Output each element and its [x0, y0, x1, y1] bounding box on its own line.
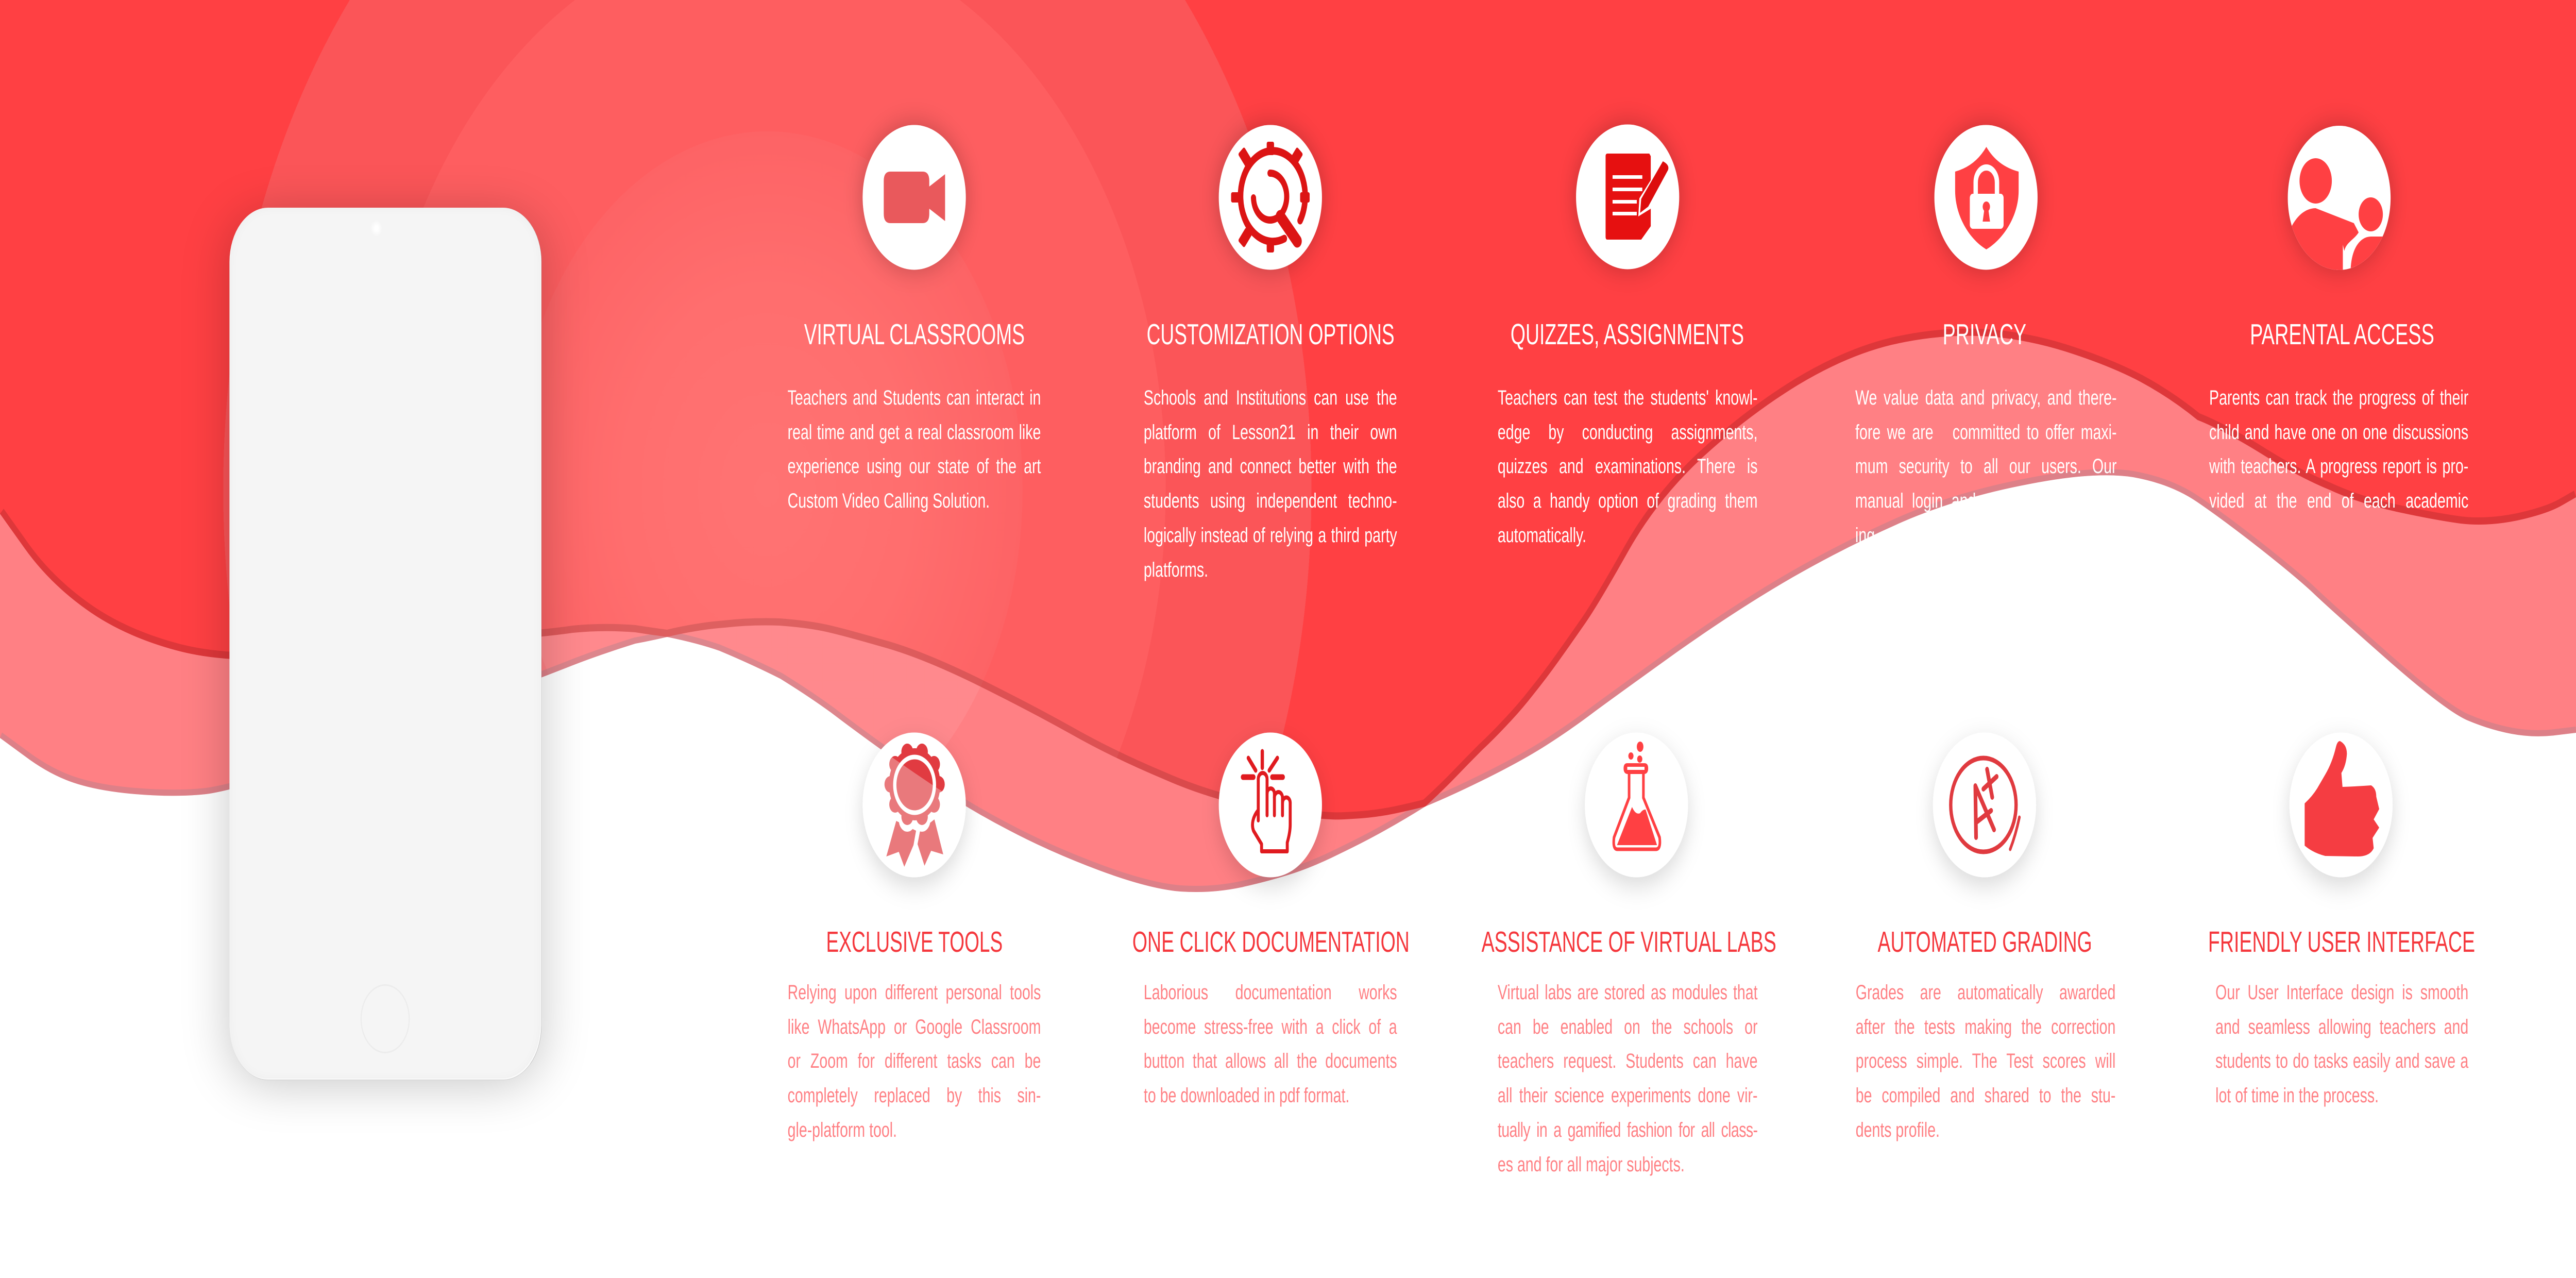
body text: real time and get a real classroom like	[788, 421, 1041, 444]
body text: or Zoom for different tasks can be	[788, 1050, 1041, 1072]
body text: can be enabled on the schools or	[1498, 1016, 1757, 1038]
body text: teachers request. Students can have	[1498, 1050, 1757, 1072]
body text: and seamless allowing teachers and	[2215, 1016, 2468, 1038]
heading: FRIENDLY USER INTERFACE	[2208, 926, 2475, 959]
heading: CUSTOMIZATION OPTIONS	[1147, 318, 1395, 351]
body text: button that allows all the documents	[1144, 1050, 1397, 1072]
heading: QUIZZES, ASSIGNMENTS	[1511, 318, 1744, 351]
wavy red background	[0, 0, 2576, 892]
pink wave layer	[0, 336, 2576, 892]
heading: PRIVACY	[1943, 318, 2026, 351]
icon: thumbs up	[2290, 733, 2393, 877]
body text	[1144, 386, 1397, 581]
heading: VIRTUAL CLASSROOMS	[804, 318, 1025, 351]
phone home button	[361, 984, 410, 1053]
body text	[1498, 386, 1757, 547]
body text	[1856, 976, 2115, 1148]
icon: video camera	[862, 125, 966, 270]
body text: mum security to all our users. Our	[1855, 455, 2116, 478]
body text: experience using our state of the art	[788, 455, 1041, 478]
heading: AUTOMATED GRADING	[1878, 926, 2092, 959]
body text: Our User Interface design is smooth	[2215, 981, 2468, 1004]
icon: A plus grade	[1933, 733, 2036, 877]
body text: Teachers and Students can interact in	[788, 386, 1041, 409]
body text: Schools and Institutions can use the	[1144, 386, 1397, 409]
body text	[1144, 981, 1397, 1107]
body text: Teachers can test the students' knowl-	[1498, 386, 1757, 409]
body text: gle-platform tool.	[788, 1119, 897, 1141]
body text: manual login and	[1855, 490, 1976, 512]
icon: clicking hand	[1219, 733, 1322, 877]
body text: dents profile.	[1856, 1119, 1940, 1141]
body text: logically instead of relying a third party	[1144, 524, 1397, 547]
body text	[1855, 386, 2116, 547]
phone camera sensor	[370, 220, 382, 237]
body text: after the tests making the correction	[1856, 1016, 2115, 1038]
body text: branding and connect better with the	[1144, 455, 1397, 478]
body text: also a handy option of grading them	[1498, 490, 1757, 512]
body text: Virtual labs are stored as modules that	[1498, 981, 1757, 1004]
body text: edge by conducting assignments,	[1498, 421, 1757, 444]
body text: fore we are committed to offer maxi-	[1855, 421, 2116, 444]
phone mockup	[229, 208, 541, 1080]
icon: lab flask	[1585, 733, 1688, 877]
body text: tually in a gamified fashion for all class-	[1498, 1119, 1757, 1141]
body text: be compiled and shared to the stu-	[1856, 1084, 2115, 1107]
body text: vided at the end of each academic	[2209, 490, 2468, 512]
body text: Relying upon different personal tools	[788, 981, 1041, 1004]
panel: one click documentation	[1132, 733, 1410, 1107]
body text: process simple. The Test scores will	[1856, 1050, 2115, 1072]
body text: ing	[1855, 524, 1875, 547]
body text	[788, 386, 1041, 512]
body text: automatically.	[1498, 524, 1586, 547]
body text	[2209, 386, 2468, 512]
body text: quizzes and examinations. There is	[1498, 455, 1757, 478]
body text	[788, 981, 1041, 1141]
body text: Custom Video Calling Solution.	[788, 490, 990, 512]
heading: ASSISTANCE OF VIRTUAL LABS	[1482, 926, 1776, 959]
panel: virtual classrooms	[788, 112, 1041, 512]
icon: gear with magnifier	[1219, 125, 1322, 270]
body text: lot of time in the process.	[2215, 1084, 2379, 1107]
body text: with teachers. A progress report is pro-	[2209, 455, 2468, 478]
panel: parental access	[2209, 112, 2468, 512]
body text: like WhatsApp or Google Classroom	[788, 1016, 1041, 1038]
body text	[1498, 976, 1757, 1182]
body text: es and for all major subjects.	[1498, 1153, 1685, 1176]
heading: ONE CLICK DOCUMENTATION	[1132, 926, 1410, 959]
panel: assistance of virtual labs	[1482, 734, 1776, 1176]
heading: EXCLUSIVE TOOLS	[826, 926, 1003, 959]
body text: Laborious documentation works	[1144, 981, 1397, 1004]
panel: automated grading	[1856, 727, 2115, 1185]
panel: customization options	[1144, 112, 1397, 581]
body text: all their science experiments done vir-	[1498, 1084, 1757, 1107]
panel: exclusive tools	[788, 733, 1041, 1141]
panel: privacy	[1855, 112, 2116, 547]
body text: students using independent techno-	[1144, 490, 1397, 512]
panel: friendly user interface	[2208, 727, 2475, 1185]
red wave layer with concentric circles	[0, 0, 2576, 819]
body text: completely replaced by this sin-	[788, 1084, 1041, 1107]
icon: award rosette	[862, 733, 966, 877]
body text: Parents can track the progress of their	[2209, 386, 2468, 409]
body text: Grades are automatically awarded	[1856, 981, 2115, 1004]
icon: shield with lock	[1935, 125, 2038, 270]
body text: child and have one on one discussions	[2209, 421, 2468, 444]
icon: document with pen	[1576, 125, 1679, 269]
body text: platforms.	[1144, 559, 1208, 581]
body text: We value data and privacy, and there-	[1855, 386, 2116, 409]
body text: become stress-free with a click of a	[1144, 1016, 1397, 1038]
icon: parent and child	[2285, 126, 2398, 278]
body text	[2215, 976, 2468, 1113]
body text: platform of Lesson21 in their own	[1144, 421, 1397, 444]
body text: students to do tasks easily and save a	[2215, 1050, 2468, 1072]
panel: quizzes, assignments	[1498, 111, 1757, 547]
heading: PARENTAL ACCESS	[2250, 318, 2434, 351]
body text: to be downloaded in pdf format.	[1144, 1084, 1349, 1107]
